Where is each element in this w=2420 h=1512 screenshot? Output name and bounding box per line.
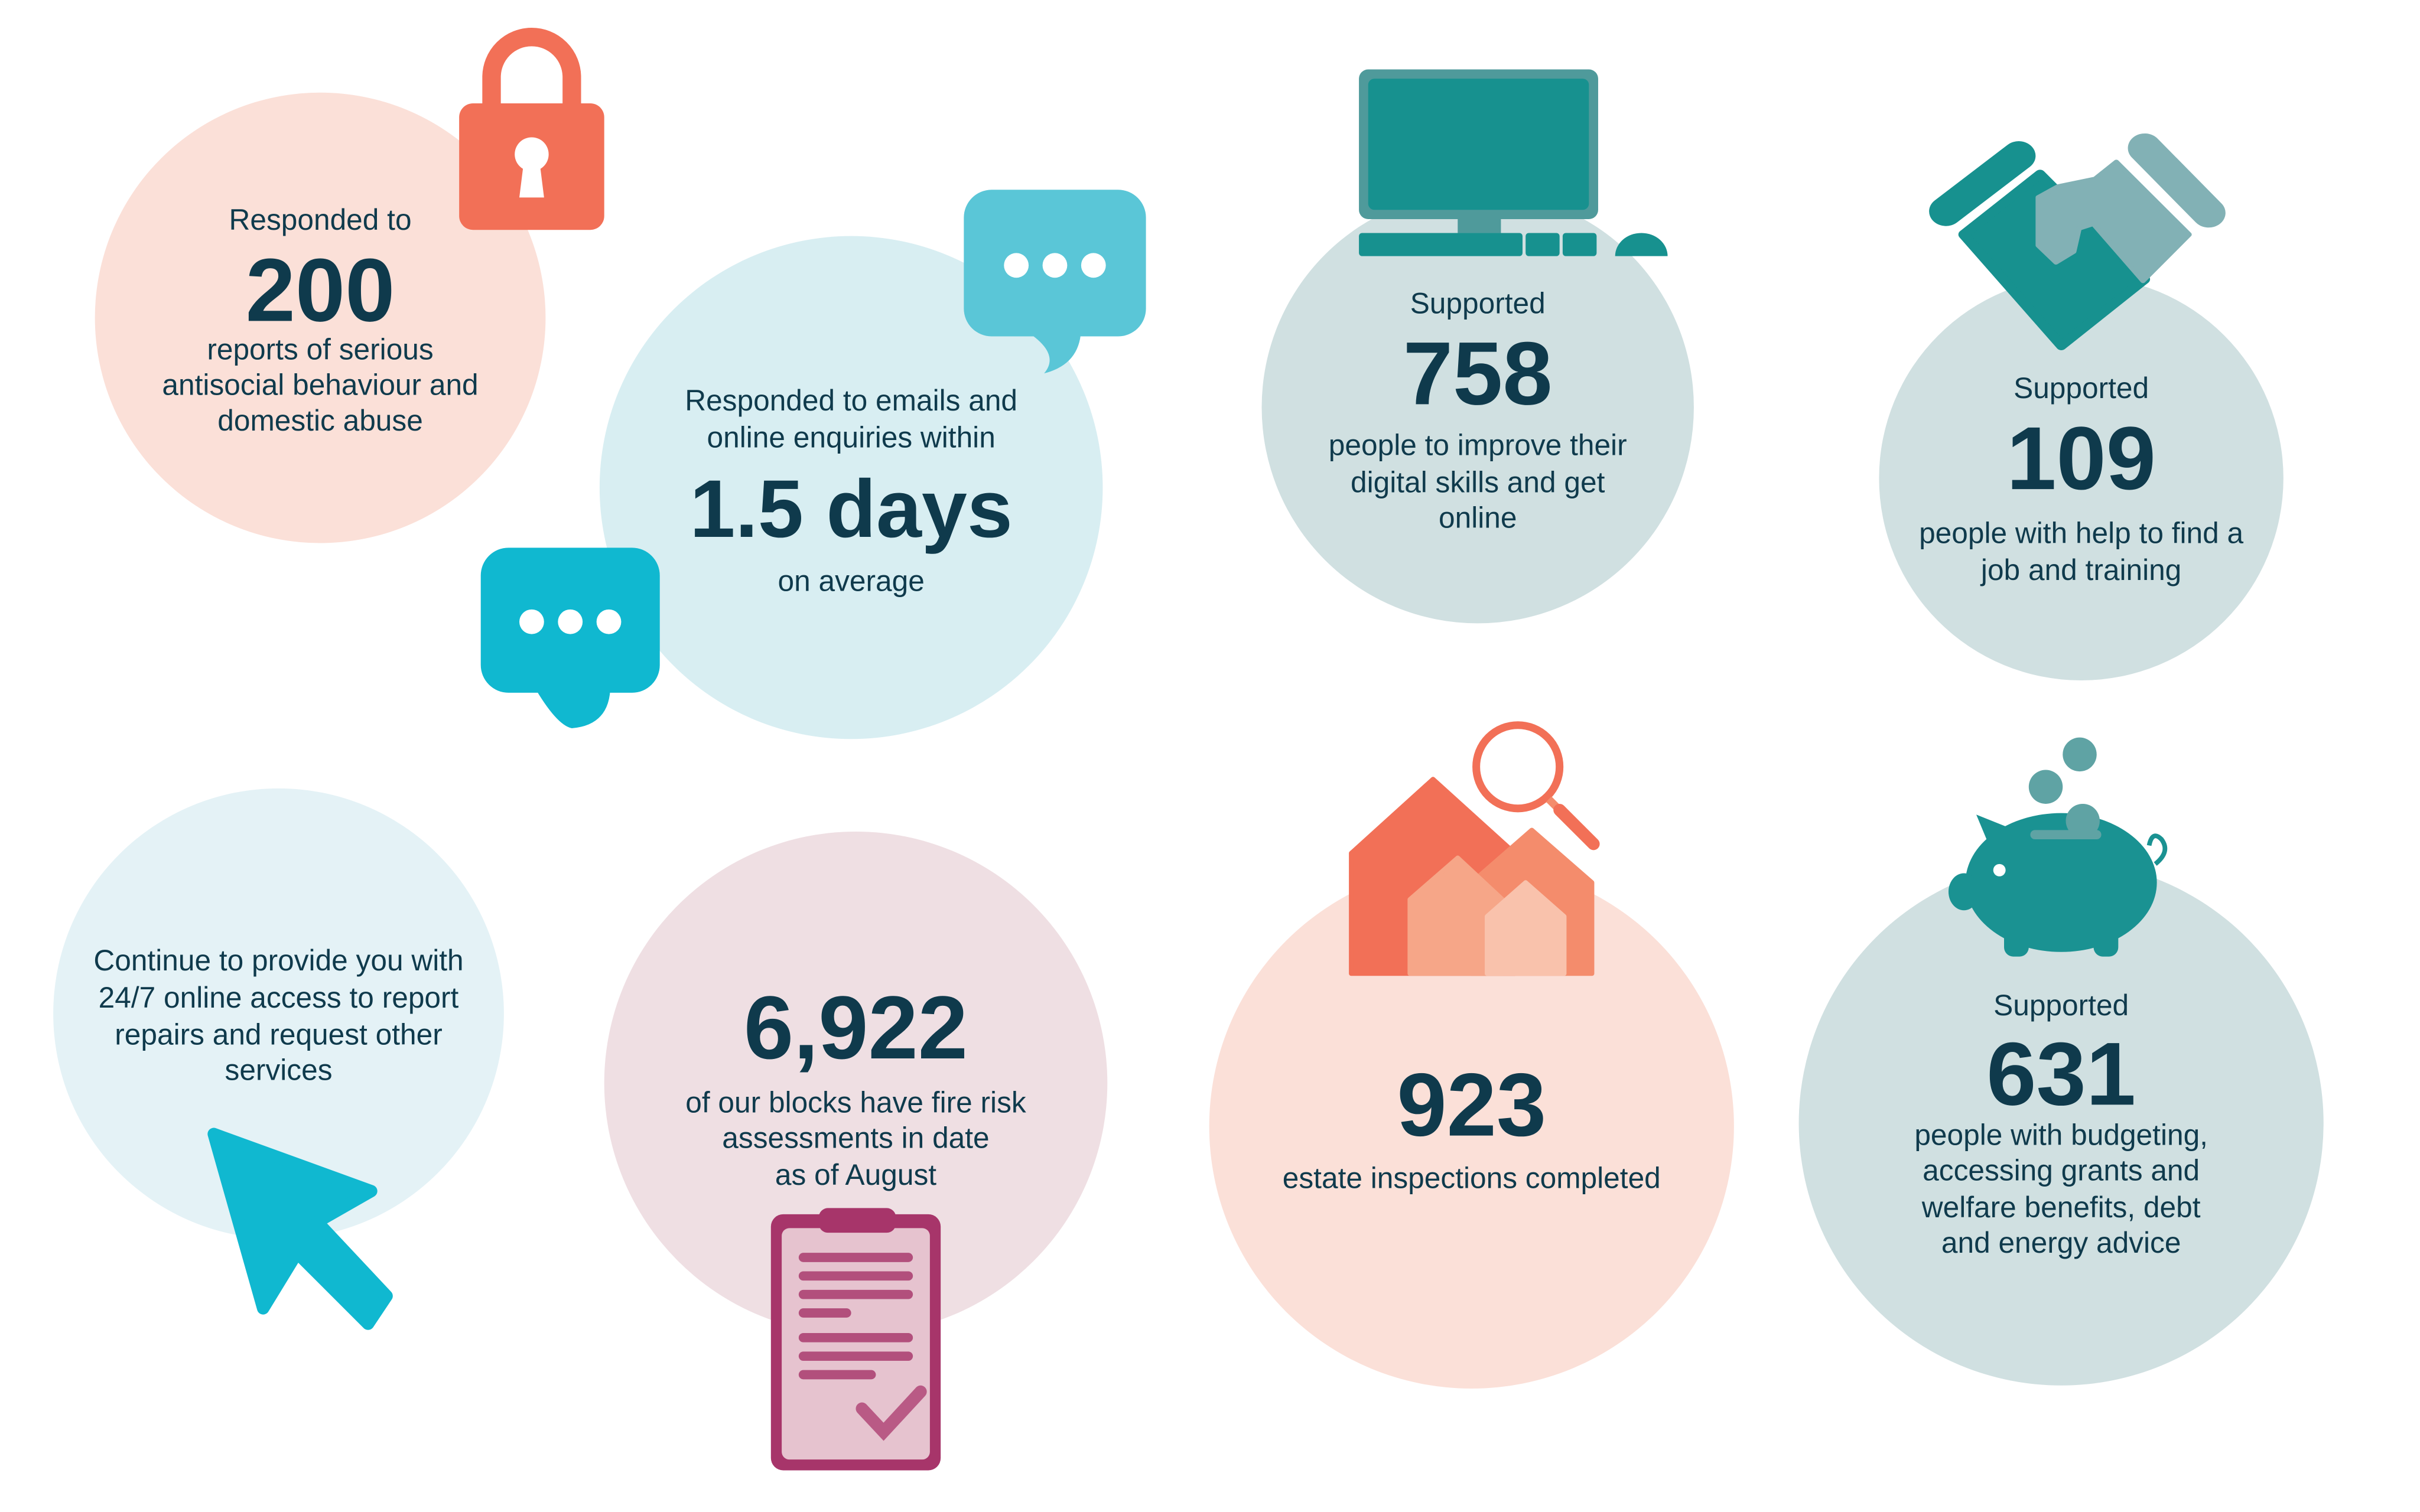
text: 109: 109: [2006, 409, 2156, 509]
icon: speech bubble bottom: [481, 548, 660, 728]
text: 109: job and training: [1980, 553, 2181, 586]
text: 758: digital skills and get: [1351, 465, 1605, 498]
icon: handshake: [1946, 148, 2208, 346]
text: 1.5 days: on average: [778, 564, 925, 597]
panel: budgeting support: [1799, 738, 2324, 1386]
text: 758: Supported: [1410, 286, 1546, 320]
panel: estate inspections: [1209, 725, 1734, 1389]
text: 631: [1914, 989, 2208, 1259]
text: 200 reports: 200: [246, 240, 395, 340]
text: 631: people with budgeting,: [1914, 1118, 2208, 1151]
text: 200 reports: antisocial behaviour and: [162, 369, 479, 402]
text: 1.5 days: 1.5 days: [689, 464, 1013, 555]
icon: speech bubble top: [964, 190, 1146, 373]
text: 1.5 days: Responded to emails and: [685, 384, 1017, 417]
panel: online access: [53, 788, 504, 1324]
panel: antisocial behaviour: [95, 37, 604, 543]
text: 200 reports: reports of serious: [207, 333, 434, 366]
text: 200 reports: domestic abuse: [217, 404, 423, 437]
icon: computer: [1359, 70, 1668, 256]
panel: jobs and training: [1879, 148, 2284, 680]
text: 758: [1329, 286, 1627, 534]
text: 6,922: as of August: [775, 1158, 936, 1191]
text: 6,922: [685, 978, 1026, 1191]
text: 923: 923: [1397, 1055, 1546, 1155]
text: 109: Supported: [2014, 372, 2149, 405]
text: 109: [1919, 372, 2244, 586]
text: 631: Supported: [1993, 989, 2129, 1022]
text: 758: online: [1439, 501, 1517, 534]
text: 758: people to improve their: [1329, 429, 1627, 462]
text: 24/7 access: Continue to provide you with: [93, 944, 464, 977]
text: 24/7 access: 24/7 online access to report: [99, 981, 459, 1014]
text: 6,922: assessments in date: [722, 1122, 990, 1155]
text: 6,922: 6,922: [744, 978, 968, 1078]
text: 24/7 access: [93, 944, 464, 1087]
text: 923: [1283, 1055, 1661, 1194]
text: 631: and energy advice: [1941, 1226, 2181, 1259]
icon: padlock: [459, 37, 604, 230]
text: 6,922: of our blocks have fire risk: [685, 1086, 1026, 1119]
panel: email response: [481, 190, 1146, 739]
text: 24/7 access: services: [225, 1054, 333, 1087]
text: 24/7 access: repairs and request other: [115, 1018, 443, 1051]
text: 631: 631: [1986, 1024, 2136, 1124]
text: 200 reports: [162, 203, 479, 437]
icon: houses with magnifier: [1351, 725, 1593, 973]
panel: digital skills: [1262, 70, 1694, 623]
text: 923: estate inspections completed: [1283, 1161, 1661, 1194]
icon: piggy bank: [1949, 738, 2165, 957]
text: 1.5 days: [685, 384, 1017, 597]
icon: clipboard: [771, 1208, 941, 1470]
text: 1.5 days: online enquiries within: [707, 421, 996, 454]
icon: cursor arrow: [214, 1134, 386, 1324]
text: 109: people with help to find a: [1919, 517, 2244, 550]
text: 200 reports: Responded to: [229, 203, 412, 236]
text: 631: welfare benefits, debt: [1921, 1191, 2201, 1224]
panel: fire risk assessments: [604, 832, 1107, 1470]
text: 758: 758: [1403, 324, 1553, 423]
text: 631: accessing grants and: [1923, 1153, 2200, 1187]
